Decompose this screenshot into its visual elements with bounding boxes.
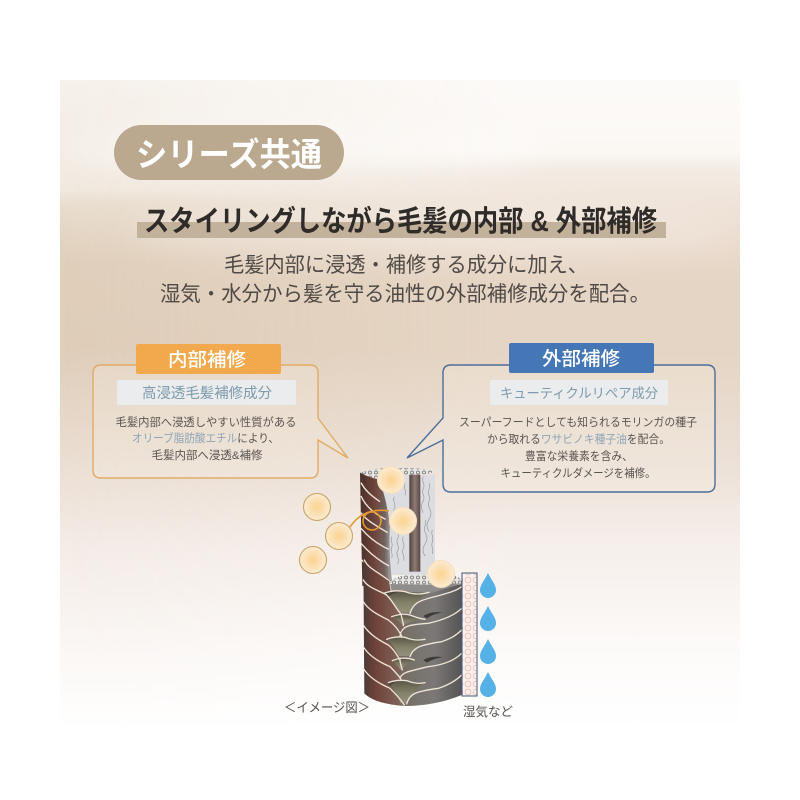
description: external: 豊富な栄養素を含み、 bbox=[525, 449, 633, 463]
intro text: 毛髪内部に浸透・補修する成分に加え、 bbox=[224, 254, 588, 277]
hair core bbox=[409, 474, 420, 572]
description: internal: 毛髪内部へ浸透しやすい性質がある bbox=[116, 415, 296, 429]
inner cortex bbox=[375, 475, 435, 575]
speech bubble: internal bbox=[93, 365, 348, 478]
description: internal: 毛髪内部へ浸透&補修 bbox=[152, 448, 263, 462]
top cross section bbox=[360, 468, 435, 479]
description: external bbox=[459, 415, 697, 480]
subheading: internal bbox=[117, 380, 296, 405]
ingredient particle path bbox=[350, 510, 389, 530]
caption: image diagram: ＜イメージ図＞ bbox=[284, 700, 370, 715]
hair lower section bbox=[363, 560, 462, 706]
cuticle scale lines bbox=[363, 560, 462, 705]
speech bubble: external bbox=[407, 365, 715, 492]
description: internal bbox=[116, 415, 296, 462]
tag: internal repair bbox=[136, 344, 281, 374]
tag: internal repair: 内部補修 bbox=[168, 349, 246, 371]
badge: series common: シリーズ共通 bbox=[136, 136, 322, 173]
background panel bbox=[60, 80, 740, 730]
subheading: external: キューティクルリペア成分 bbox=[500, 386, 658, 401]
hair upper section bbox=[360, 468, 435, 586]
panel: external repair bbox=[407, 343, 715, 492]
lower cuticle body bbox=[363, 560, 462, 706]
subheading: external bbox=[490, 380, 668, 405]
cross section floor bbox=[390, 575, 462, 586]
ingredient particles bbox=[300, 466, 454, 588]
protective film bbox=[462, 573, 477, 696]
shadows under scales bbox=[385, 592, 442, 686]
subheading: internal: 高浸透毛髪補修成分 bbox=[142, 385, 272, 402]
heading with underline bar: スタイリングしながら毛髪の内部 & 外部補修 bbox=[144, 204, 657, 238]
caption: humidity: 湿気など bbox=[463, 704, 513, 719]
description: external: キューティクルダメージを補修。 bbox=[500, 466, 656, 480]
intro text: 湿気・水分から髪を守る油性の外部補修成分を配合。 bbox=[160, 283, 650, 306]
tag: external repair bbox=[509, 343, 654, 373]
badge: series common bbox=[114, 125, 344, 180]
description: external: スーパーフードとしても知られるモリンガの種子 bbox=[459, 415, 697, 429]
tag: external repair: 外部補修 bbox=[542, 348, 620, 370]
description: internal: オリーブ脂肪酸エチルにより、 bbox=[132, 431, 279, 445]
upper cuticle bbox=[360, 473, 392, 586]
intro text bbox=[160, 254, 650, 306]
olive pockets bbox=[383, 591, 428, 703]
hair diagram bbox=[300, 466, 496, 706]
water drops bbox=[480, 573, 496, 697]
description: external: から取れるワサビノキ種子油を配合。 bbox=[487, 432, 670, 446]
panel: internal repair bbox=[93, 344, 348, 478]
